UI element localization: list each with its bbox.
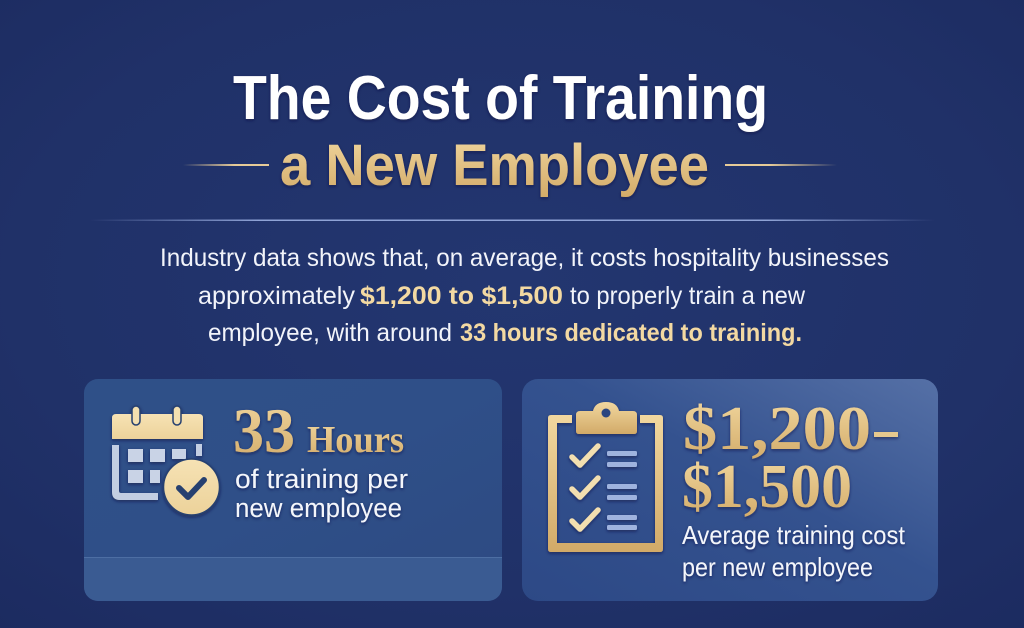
card background (522, 379, 938, 601)
title rule right (725, 164, 837, 166)
intro paragraph (160, 244, 889, 347)
paragraph line 3 (208, 319, 802, 347)
stat: 33 Hours: 33 (233, 395, 295, 466)
paragraph line 2: $1,200 to $1,500 (360, 282, 563, 310)
stat: cost range: $1,500 (682, 453, 852, 521)
title line 2: a New Employee (280, 133, 709, 198)
paragraph line 2: approximately (198, 282, 355, 310)
stat description (682, 520, 906, 582)
header divider (90, 220, 935, 221)
paragraph line 2: to properly train a new (570, 282, 806, 310)
panel: training cost (522, 379, 938, 601)
paragraph line 3: 33 hours dedicated to training. (460, 319, 802, 347)
paragraph line 1: Industry data shows that, on average, it costs hospitality businesses (160, 244, 889, 272)
paragraph line 3: employee, with around (208, 319, 452, 347)
icon: calendar with check (112, 406, 220, 515)
paragraph line 2 (198, 282, 806, 310)
stat description: Average training cost (682, 520, 906, 550)
title rule left (183, 164, 269, 166)
stat description: of training per (235, 464, 408, 494)
stat: 33 Hours: Hours (307, 419, 404, 461)
stat description: new employee (235, 493, 402, 523)
icon: clipboard checklist (548, 402, 663, 552)
stat: 33 Hours (233, 395, 404, 466)
panel: 33 hours (84, 379, 502, 601)
stat: cost range: $1,200 (683, 395, 871, 463)
stat: cost range (682, 395, 898, 521)
card background (84, 379, 502, 601)
title line 1: The Cost of Training (233, 64, 768, 133)
stat description (235, 464, 408, 523)
card bottom band (84, 557, 502, 601)
stat description: per new employee (682, 552, 873, 582)
title (233, 64, 768, 198)
